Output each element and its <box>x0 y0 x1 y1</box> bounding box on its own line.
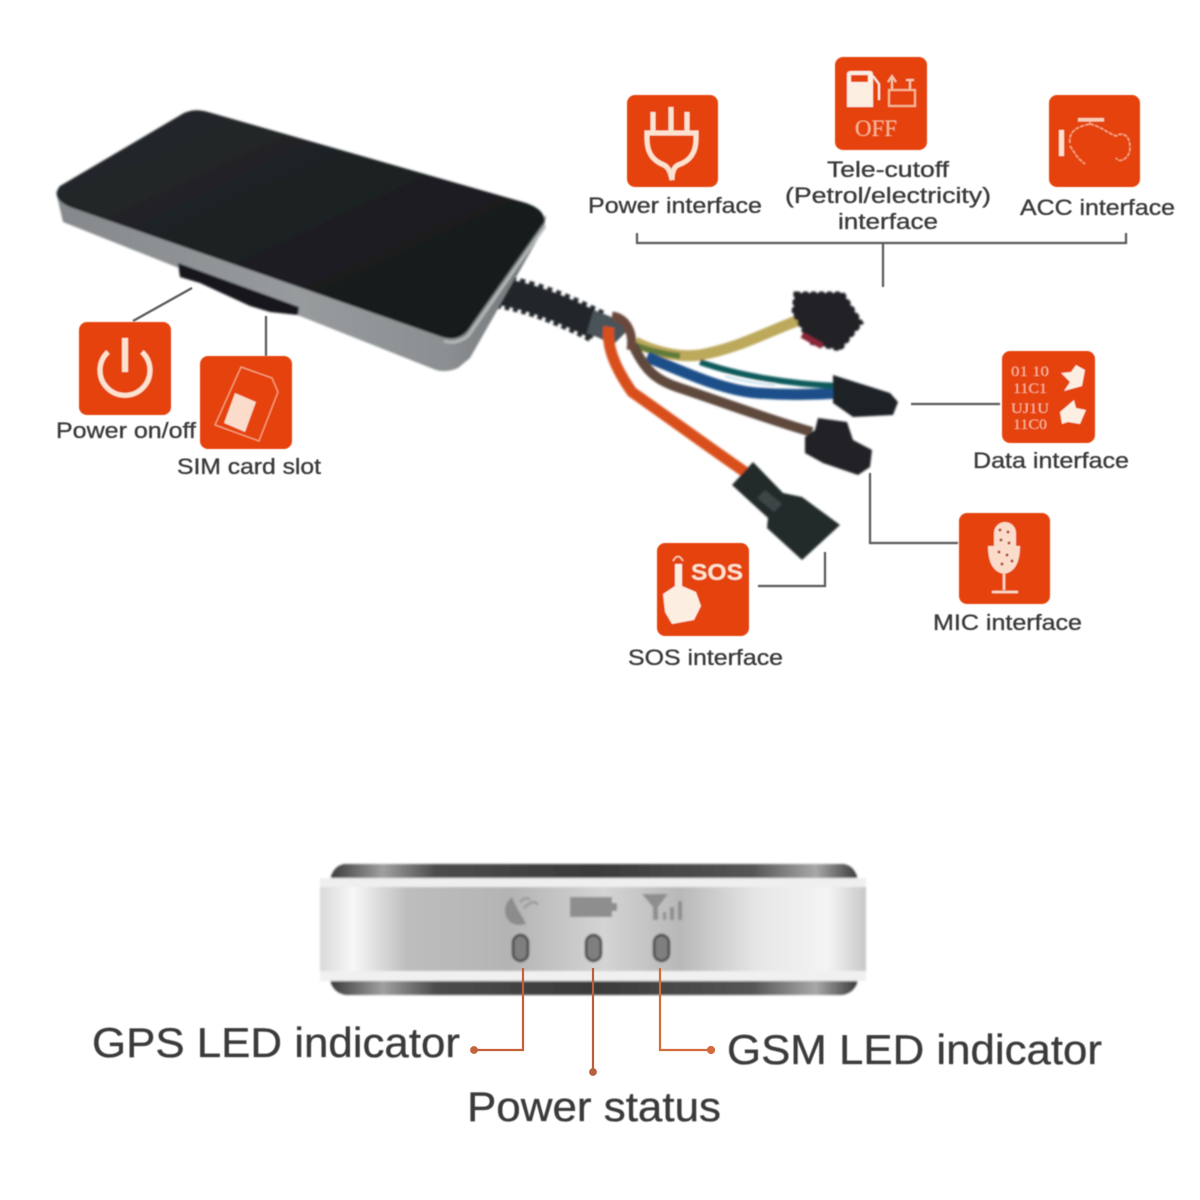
label: power interface: Power interface <box>588 193 762 218</box>
icon: tele-cutoff <box>835 57 927 150</box>
label: GPS LED indicator: GPS LED indicator <box>92 1019 460 1066</box>
GPS LED <box>513 935 528 961</box>
icon: SOS <box>657 543 749 636</box>
yellow wires <box>635 318 805 356</box>
label: tele-cutoff interface: (Petrol/electricity) <box>785 183 991 208</box>
label: power on/off: Power on/off <box>56 418 197 443</box>
label: power status: Power status <box>467 1083 721 1130</box>
label: data interface: Data interface <box>973 448 1129 473</box>
icon: GPS satellite <box>505 897 538 925</box>
leader: power status <box>590 968 596 1075</box>
icon: data <box>1002 351 1095 443</box>
label: GSM LED indicator: GSM LED indicator <box>727 1026 1102 1073</box>
GSM LED <box>654 935 669 961</box>
icon: power plug <box>627 95 718 187</box>
leader: GPS LED <box>471 968 523 1053</box>
label: ACC interface: ACC interface <box>1020 195 1175 220</box>
connector data <box>833 375 898 417</box>
connector lines <box>133 233 1126 586</box>
label: tele-cutoff interface: interface <box>838 209 938 234</box>
icon: tele-cutoff: OFF <box>855 116 897 141</box>
top metal band <box>330 864 858 880</box>
connector SOS <box>732 462 840 560</box>
label: tele-cutoff interface: Tele-cutoff <box>827 157 950 182</box>
orange wire <box>608 327 745 472</box>
icon: data: UJ1U <box>1011 401 1049 417</box>
SIM and power slot <box>178 263 299 315</box>
bottom metal band <box>330 980 858 995</box>
power LED <box>586 935 601 961</box>
silver face <box>320 878 866 980</box>
icon: battery <box>570 897 617 917</box>
icon: microphone <box>959 513 1050 604</box>
label: SOS interface: SOS interface <box>628 645 783 670</box>
icon: data: 11C0 <box>1013 417 1047 433</box>
device: GPS tracker body <box>56 110 546 371</box>
cable and coloured wires <box>490 290 898 560</box>
blue wires <box>647 357 838 394</box>
connector SOS highlight <box>757 490 782 512</box>
sleeve exit <box>590 322 620 338</box>
ribbed black sleeve <box>490 290 598 327</box>
brown wire <box>633 345 812 432</box>
icon: ACC engine <box>1049 95 1140 187</box>
icon: signal antenna <box>642 894 682 920</box>
connector top <box>793 293 862 350</box>
connector mic <box>805 418 872 475</box>
leader: GSM LED <box>660 968 714 1053</box>
label: MIC interface: MIC interface <box>933 610 1082 635</box>
label: SIM card slot: SIM card slot <box>177 454 321 479</box>
icon: data: 11C1 <box>1013 381 1047 397</box>
icon: SIM card <box>200 356 292 449</box>
icon: power on/off <box>79 322 171 415</box>
icon: data: 01 10 <box>1011 364 1049 380</box>
label: tele-cutoff interface <box>785 157 991 234</box>
device: end view with LED indicators <box>320 864 866 995</box>
icon: SOS: SOS <box>691 559 743 585</box>
